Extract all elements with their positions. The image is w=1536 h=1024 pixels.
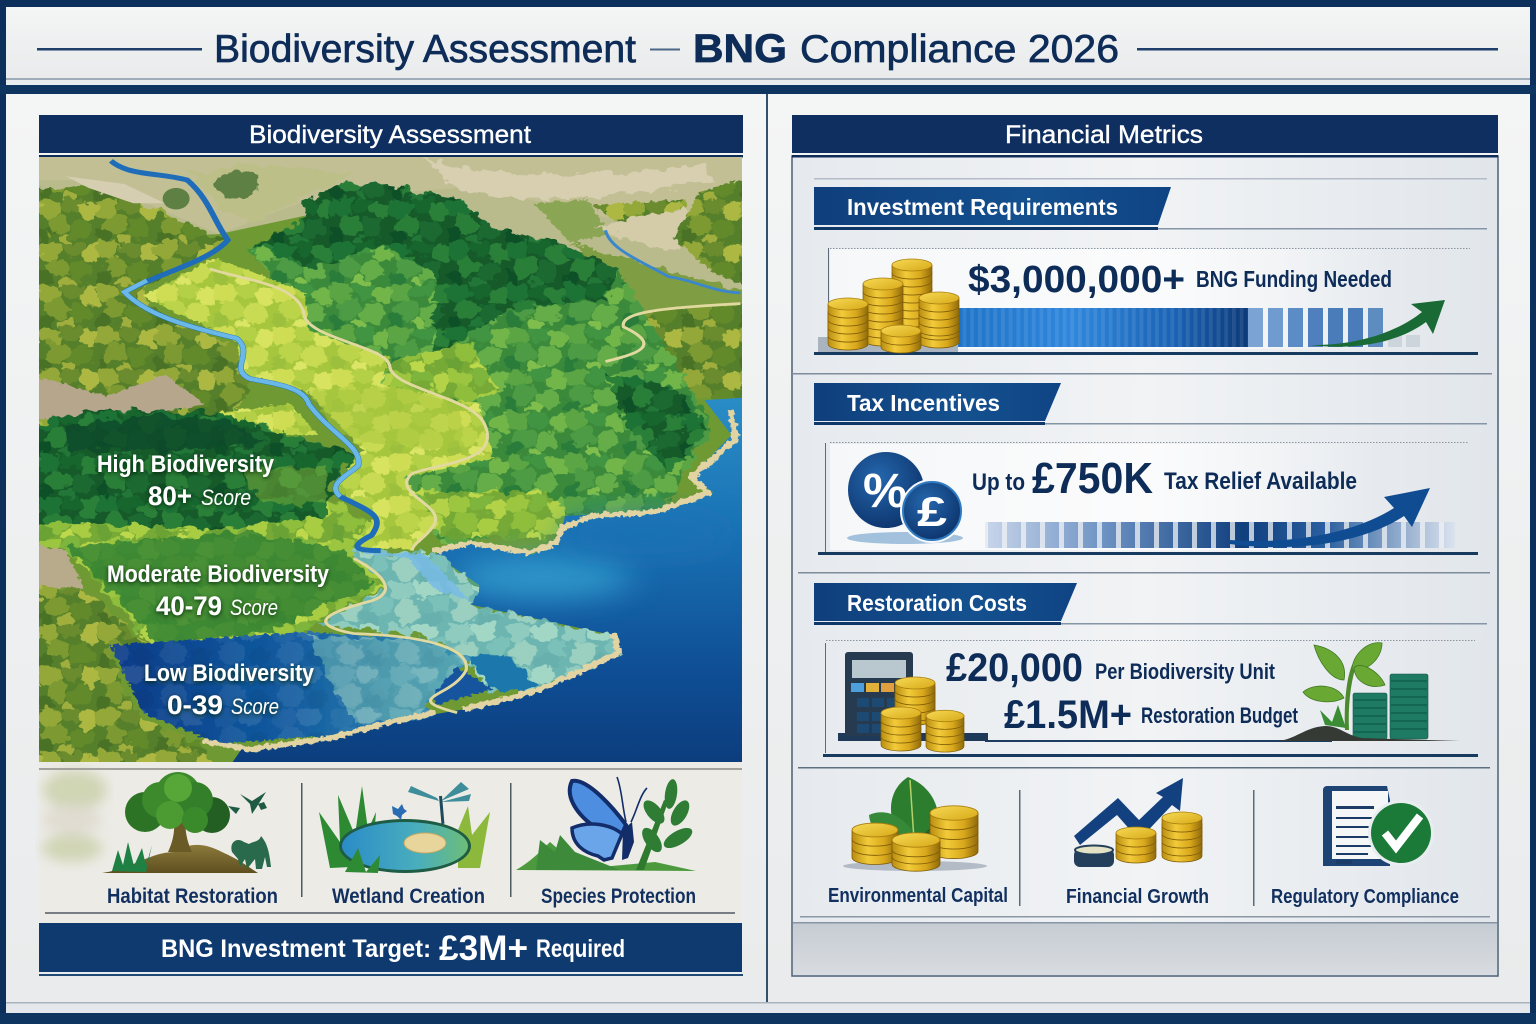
panel header: biodiversity assessment: Biodiversity Assessment xyxy=(249,121,531,149)
rock xyxy=(39,374,204,420)
section: tax incentives: Tax Incentives xyxy=(847,390,1000,416)
dark forest xyxy=(255,180,619,358)
map label: high biodiversity xyxy=(97,451,275,511)
top hills xyxy=(39,157,742,251)
map label: low biodiversity: Low Biodiversity xyxy=(144,660,315,687)
value: tax relief: Up to xyxy=(972,469,1025,496)
map label: low biodiversity xyxy=(144,660,315,720)
section: restoration costs xyxy=(814,583,1487,757)
left bottom forest xyxy=(39,584,212,762)
section: investment requirements: Investment Requirements xyxy=(847,194,1118,220)
mid forest backing xyxy=(250,215,713,547)
map label: high biodiversity: 80+ xyxy=(148,481,192,511)
investment target banner xyxy=(39,923,743,976)
low zone xyxy=(111,632,471,744)
sea xyxy=(232,398,742,762)
panel: financial metrics xyxy=(792,115,1498,976)
value: cost per unit: £20,000 xyxy=(946,646,1083,690)
coast xyxy=(205,412,736,749)
right fields xyxy=(568,242,742,311)
map label: low biodiversity: 0-39 xyxy=(167,690,223,720)
panel header: biodiversity assessment xyxy=(39,115,743,158)
icon: percent and pound coins: £ xyxy=(917,488,947,535)
icon: financial growth xyxy=(1074,778,1202,867)
teal patches xyxy=(318,551,619,693)
bar: tax relief xyxy=(985,522,1455,548)
header panel xyxy=(0,7,1536,94)
section: investment requirements xyxy=(814,187,1487,355)
panel header: financial metrics xyxy=(792,115,1498,158)
value: restoration budget: Restoration Budget xyxy=(1141,703,1299,728)
icon row: outcomes xyxy=(800,777,1490,918)
icon: seedling and green stacks xyxy=(1277,643,1460,741)
high zone xyxy=(21,410,354,529)
icon: regulatory compliance xyxy=(1323,786,1434,866)
arrow: blue growth xyxy=(1230,488,1430,547)
label: financial growth: Financial Growth xyxy=(1066,886,1209,908)
map label: high biodiversity: High Biodiversity xyxy=(97,451,275,478)
icon: environmental capital xyxy=(843,777,987,871)
value: restoration budget xyxy=(1004,693,1299,737)
title xyxy=(214,27,1119,71)
label: wetland creation: Wetland Creation xyxy=(332,885,485,908)
map label: low biodiversity: Score xyxy=(231,694,279,719)
value: funding needed: BNG Funding Needed xyxy=(1196,266,1392,292)
value: tax relief: Tax Relief Available xyxy=(1164,468,1357,495)
label: habitat restoration: Habitat Restoration xyxy=(107,885,278,908)
left forest xyxy=(21,184,250,427)
label: species protection: Species Protection xyxy=(541,885,696,908)
icon: tree on mound xyxy=(102,772,271,873)
yellow field xyxy=(142,257,493,549)
label: environmental capital: Environmental Capital xyxy=(828,885,1008,907)
value: cost per unit: Per Biodiversity Unit xyxy=(1095,659,1276,684)
map label: high biodiversity: Score xyxy=(201,485,251,510)
value: tax relief xyxy=(972,454,1357,503)
map label: moderate biodiversity: Moderate Biodiversity xyxy=(107,561,330,588)
title: Compliance 2026 xyxy=(800,28,1119,71)
investment target banner: £3M+ xyxy=(439,929,528,968)
map label: moderate biodiversity xyxy=(107,561,330,621)
paths xyxy=(210,269,740,713)
icon: gold coin stacks xyxy=(828,259,959,353)
moderate zone xyxy=(39,500,384,644)
icon: percent and pound coins: % xyxy=(863,465,907,518)
value: funding needed: $3,000,000+ xyxy=(968,259,1185,301)
map label: moderate biodiversity: 40-79 xyxy=(156,591,222,621)
icon: butterfly and plants xyxy=(516,777,696,871)
title: Biodiversity Assessment xyxy=(214,28,636,71)
value: restoration budget: £1.5M+ xyxy=(1004,693,1132,737)
section: tax incentives xyxy=(814,383,1487,555)
investment target banner: Required xyxy=(536,935,625,963)
icon: percent and pound coins xyxy=(847,451,964,544)
small rock xyxy=(39,544,84,589)
bar: funding progress xyxy=(958,308,1420,347)
investment target banner: BNG Investment Target: xyxy=(161,935,431,963)
label: regulatory compliance: Regulatory Compliance xyxy=(1271,886,1459,908)
river xyxy=(111,161,381,551)
panel: biodiversity assessment xyxy=(21,115,767,976)
section: restoration costs: Restoration Costs xyxy=(847,590,1027,616)
arrow: green growth xyxy=(1310,300,1445,347)
action strip xyxy=(39,762,742,923)
icon: calculator and coins xyxy=(838,652,988,752)
title: BNG xyxy=(693,27,787,71)
value: cost per unit xyxy=(946,646,1276,690)
value: tax relief: £750K xyxy=(1032,454,1153,503)
icon: wetland pond xyxy=(319,782,490,873)
value: funding needed xyxy=(968,259,1392,301)
map label: moderate biodiversity: Score xyxy=(230,595,278,620)
panel header: financial metrics: Financial Metrics xyxy=(1005,121,1203,149)
map: landscape zones xyxy=(39,157,742,762)
base ground xyxy=(39,216,732,762)
